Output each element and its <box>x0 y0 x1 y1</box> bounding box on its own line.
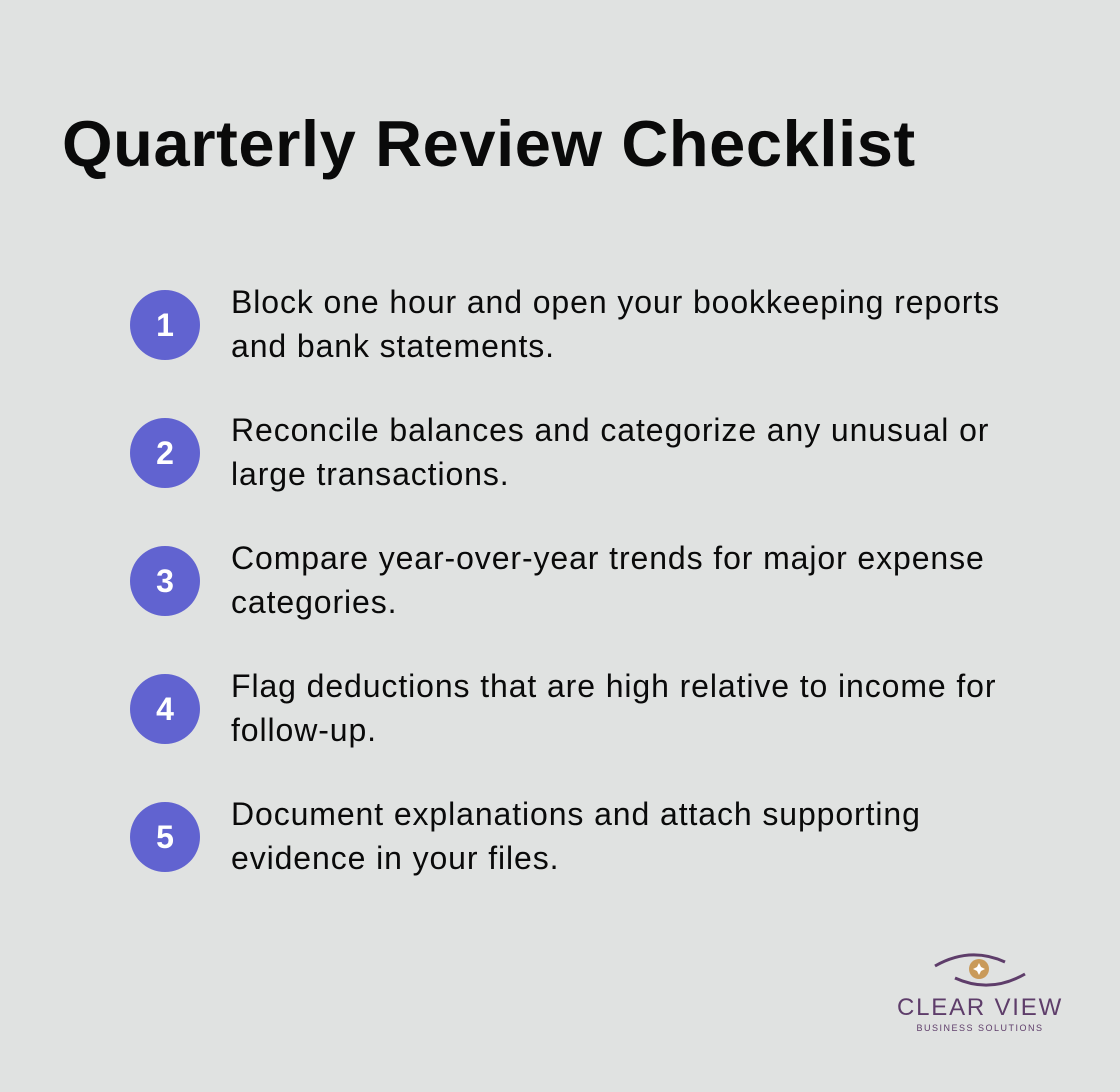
number badge 5: 5 <box>156 819 174 855</box>
number badge 4 <box>130 674 200 744</box>
text 3: categories. <box>231 584 397 620</box>
logo: BUSINESS SOLUTIONS <box>916 1023 1044 1033</box>
number badge 1: 1 <box>156 307 174 343</box>
text 3 <box>231 540 985 620</box>
text 5: evidence in your files. <box>231 840 559 876</box>
item 4 <box>130 668 996 748</box>
text 1: Block one hour and open your bookkeeping reports <box>231 284 1000 320</box>
text 2 <box>231 412 989 492</box>
text 1: and bank statements. <box>231 328 555 364</box>
number badge 2 <box>130 418 200 488</box>
logo text: CLEAR VIEW <box>897 994 1063 1021</box>
text 2: large transactions. <box>231 456 510 492</box>
logo <box>897 953 1063 1033</box>
item 1 <box>130 284 1000 364</box>
text 5: Document explanations and attach supporting <box>231 796 921 832</box>
text 2: Reconcile balances and categorize any unusual or <box>231 412 989 448</box>
text 5 <box>231 796 921 876</box>
icon: eye <box>934 953 1026 987</box>
number badge 2: 2 <box>156 435 174 471</box>
text 1 <box>231 284 1000 364</box>
number badge 3 <box>130 546 200 616</box>
number badge 4: 4 <box>156 691 174 727</box>
number badge 1 <box>130 290 200 360</box>
number badge 5 <box>130 802 200 872</box>
text 3: Compare year-over-year trends for major expense <box>231 540 985 576</box>
item 5 <box>130 796 921 876</box>
item 3 <box>130 540 985 620</box>
item 2 <box>130 412 989 492</box>
text 4 <box>231 668 996 748</box>
text 4: Flag deductions that are high relative to income for <box>231 668 996 704</box>
text 4: follow-up. <box>231 712 377 748</box>
number badge 3: 3 <box>156 563 174 599</box>
title: Quarterly Review Checklist <box>62 107 916 180</box>
